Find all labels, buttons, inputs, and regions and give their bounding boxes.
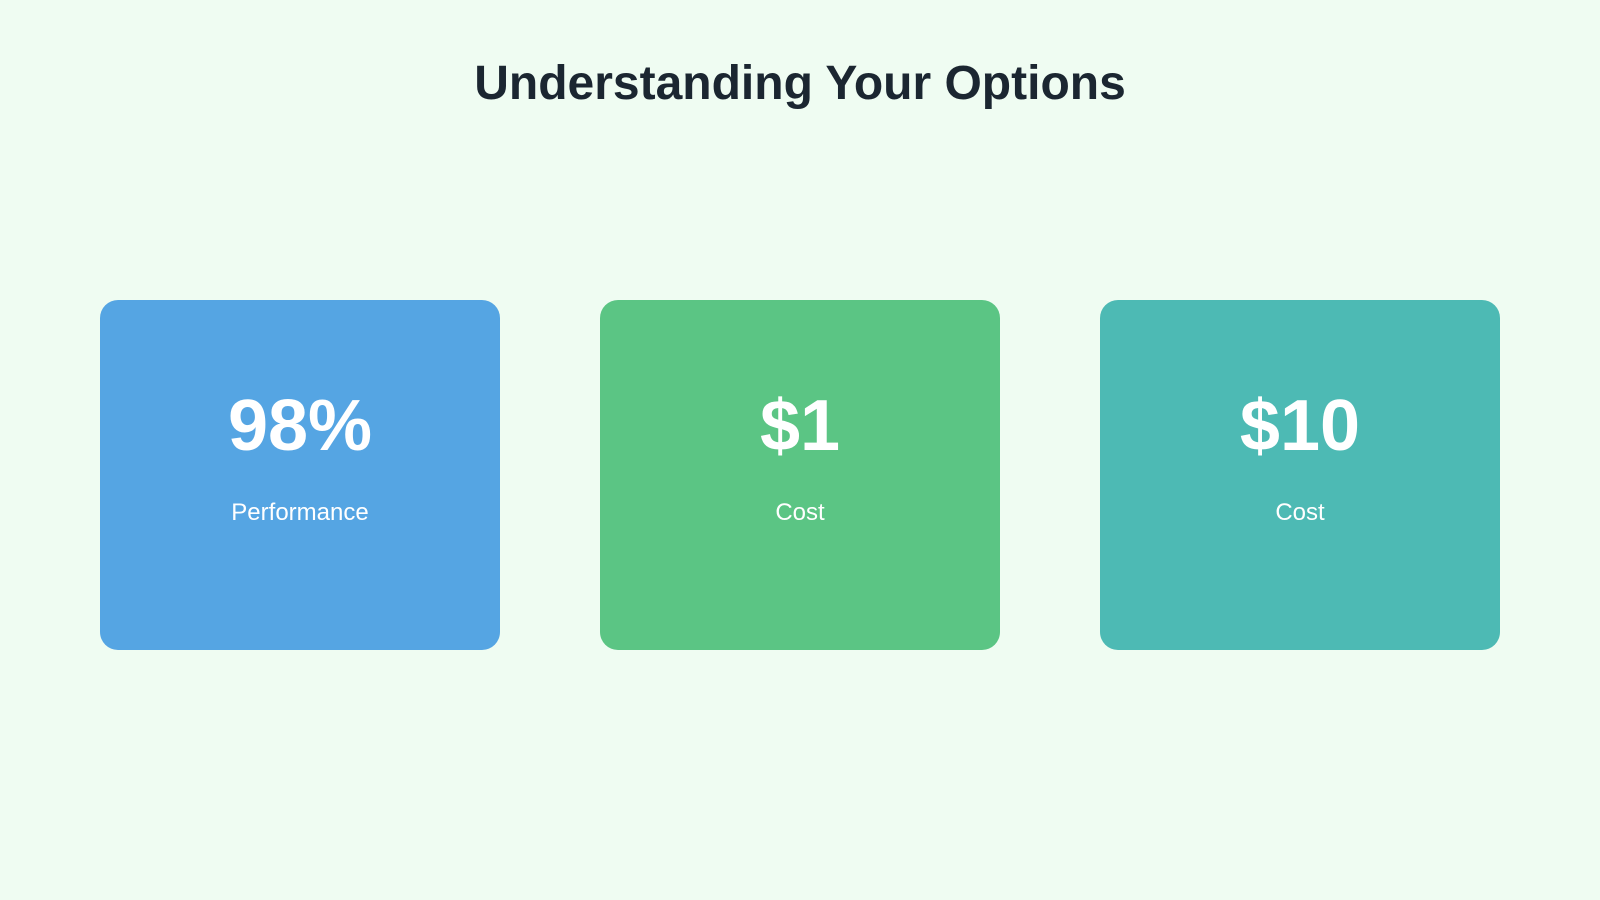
panel: cost card $10 xyxy=(1100,300,1500,650)
stat label: Cost: Cost xyxy=(775,499,825,526)
stat label: Cost: Cost xyxy=(1275,499,1325,526)
title: Understanding Your Options xyxy=(474,57,1126,110)
stat value: $10: $10 xyxy=(1240,386,1360,466)
stat value: $1: $1 xyxy=(760,386,840,466)
stat value: 98%: 98% xyxy=(228,386,372,466)
panel: cost card $1 xyxy=(600,300,1000,650)
panel: performance card xyxy=(100,300,500,650)
stat label: Performance: Performance xyxy=(231,499,369,526)
